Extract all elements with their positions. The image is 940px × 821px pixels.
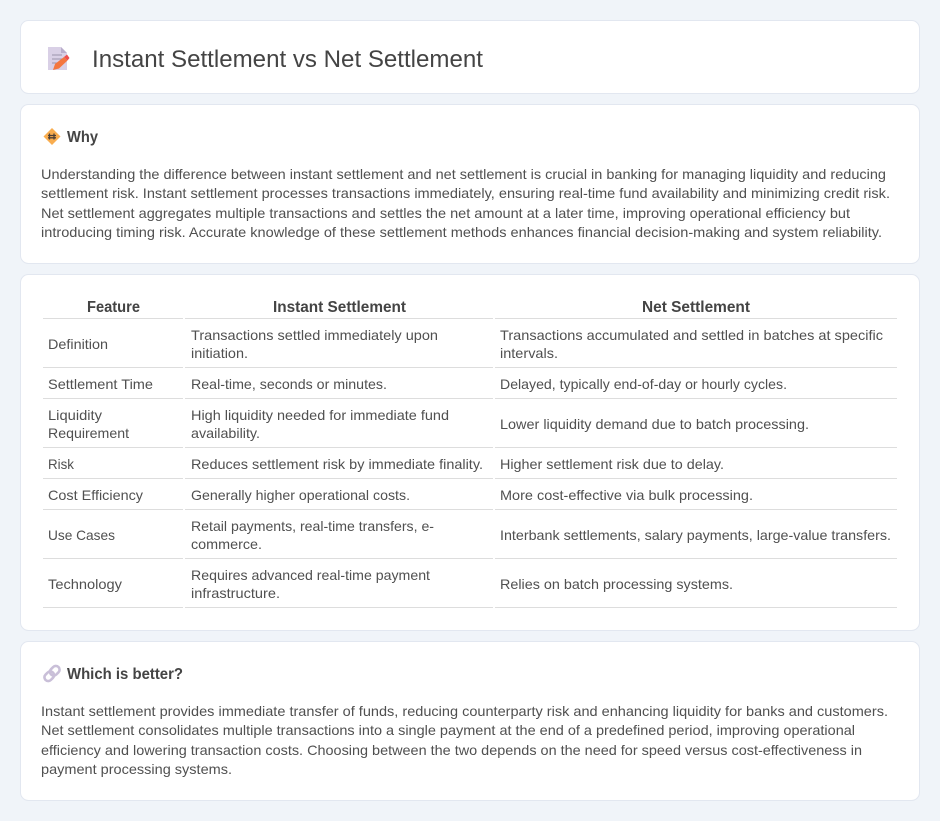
text block: why paragraph: introducing timing risk. Accurate knowledge of these settlement methods enhances financial decision-making and system reliability.	[41, 224, 882, 240]
panel: which is better	[20, 642, 920, 800]
row: definition: Transactions accumulated and settled in batches at specific	[500, 327, 883, 343]
row: settlement time: Settlement Time	[48, 376, 153, 392]
panel: comparison table	[20, 274, 920, 630]
row: risk: Risk	[48, 456, 75, 472]
icon: chain link	[43, 664, 61, 683]
row: use cases	[48, 518, 891, 552]
row: risk: Higher settlement risk due to delay.	[500, 456, 724, 472]
text block: which is better paragraph	[41, 703, 888, 777]
text block: why paragraph	[41, 166, 890, 240]
row: liquidity requirement: availability.	[191, 425, 260, 441]
panel: header	[20, 20, 920, 94]
row: definition: Transactions settled immediately upon	[191, 327, 438, 343]
table header row: Net Settlement	[642, 299, 751, 316]
text block: why paragraph: Net settlement aggregates multiple transactions and settles the net amount at a later time, improving operational efficiency but	[41, 205, 850, 221]
row: definition: Definition	[48, 336, 108, 352]
row: use cases: commerce.	[191, 536, 262, 552]
row: definition: initiation.	[191, 345, 248, 361]
row: risk: Reduces settlement risk by immediate finality.	[191, 456, 483, 472]
row: technology: Relies on batch processing systems.	[500, 576, 733, 592]
row: use cases: Interbank settlements, salary payments, large-value transfers.	[500, 527, 891, 543]
row: cost efficiency: Generally higher operational costs.	[191, 487, 410, 503]
text block: which is better paragraph: Net settlement consolidates multiple transactions into a single payment at the end of a predefined period, improving operational	[41, 722, 855, 738]
table header row	[87, 299, 751, 316]
row: liquidity requirement	[48, 407, 809, 441]
row: use cases: Use Cases	[48, 527, 115, 543]
row: settlement time	[48, 376, 787, 392]
text block: why paragraph: settlement risk. Instant settlement processes transactions immediately, ensuring real-time fund availability and minimizing credit risk.	[41, 185, 890, 201]
row: technology: infrastructure.	[191, 585, 280, 601]
row: risk	[48, 456, 724, 472]
heading: which is better: Which is better?	[67, 666, 183, 683]
text block: which is better paragraph: payment processing systems.	[41, 761, 232, 777]
row: settlement time: Real-time, seconds or minutes.	[191, 376, 387, 392]
table header row: Instant Settlement	[273, 299, 407, 316]
text block: why paragraph: Understanding the difference between instant settlement and net settlement is crucial in banking for managing liquidity and reducing	[41, 166, 886, 182]
row: technology: Technology	[48, 576, 122, 592]
row: technology: Requires advanced real-time payment	[191, 567, 430, 583]
row: cost efficiency	[48, 487, 753, 503]
icon: orange diamond sign	[44, 128, 60, 145]
row: settlement time: Delayed, typically end-of-day or hourly cycles.	[500, 376, 787, 392]
row: cost efficiency: More cost-effective via bulk processing.	[500, 487, 753, 503]
row: liquidity requirement: Requirement	[48, 425, 129, 441]
text block: which is better paragraph: efficiency and lowering transaction costs. Choosing between the two depends on the need for speed versus cost-effectiveness in	[41, 742, 862, 758]
row: liquidity requirement: High liquidity needed for immediate fund	[191, 407, 449, 423]
title: Instant Settlement vs Net Settlement	[92, 46, 483, 73]
heading: why: Why	[67, 129, 98, 146]
icon: memo with pencil	[48, 47, 70, 70]
row: liquidity requirement: Lower liquidity demand due to batch processing.	[500, 416, 809, 432]
panel: why	[20, 104, 920, 264]
row: definition: intervals.	[500, 345, 558, 361]
text block: which is better paragraph: Instant settlement provides immediate transfer of funds, reducing counterparty risk and enhancing liquidity for banks and customers.	[41, 703, 888, 719]
row: cost efficiency: Cost Efficiency	[48, 487, 143, 503]
row: definition	[48, 327, 883, 361]
row: liquidity requirement: Liquidity	[48, 407, 102, 423]
row: use cases: Retail payments, real-time transfers, e-	[191, 518, 434, 534]
table header row: Feature	[87, 299, 140, 316]
row: technology	[48, 567, 733, 601]
